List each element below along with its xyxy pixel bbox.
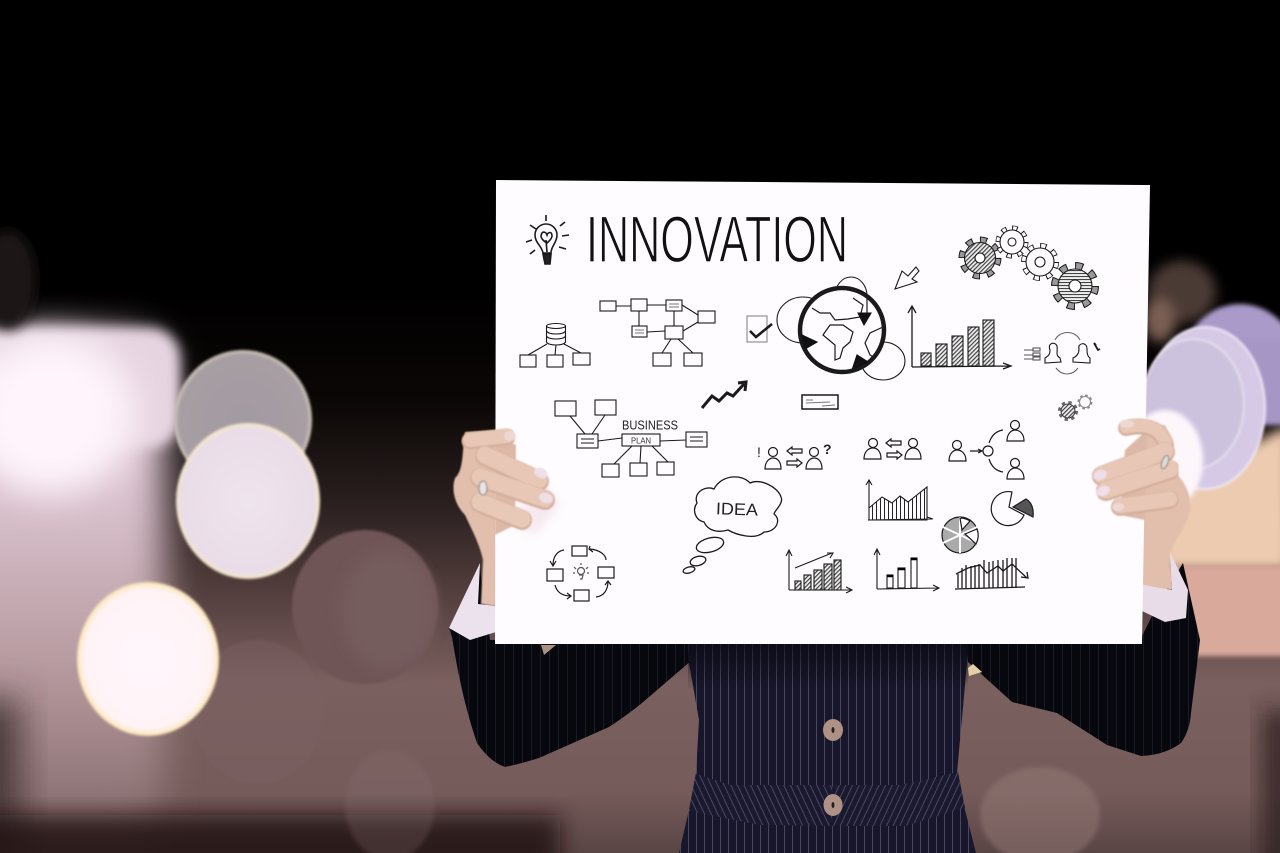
bar chart: columns	[874, 549, 939, 591]
diagram: network	[600, 299, 715, 366]
board	[495, 180, 1150, 644]
icon: people tree	[949, 420, 1024, 479]
icon: pointer arrow	[895, 267, 919, 289]
icon: small document	[802, 395, 838, 409]
hand: left fingers	[470, 431, 560, 535]
icon: people exchange	[864, 438, 921, 459]
icon: check box	[747, 316, 772, 342]
right sleeve	[966, 563, 1200, 756]
title: INNOVATION	[586, 202, 848, 276]
icon: team exchange	[1024, 332, 1100, 374]
icon: trend arrow	[702, 382, 746, 408]
area chart	[866, 480, 933, 520]
icon: light bulb	[526, 215, 569, 264]
pie chart: wedge	[991, 492, 1033, 526]
icon: people question: ?	[823, 441, 832, 457]
person: suit	[449, 563, 1200, 853]
left sleeve	[449, 568, 700, 767]
diagram: database	[520, 324, 590, 367]
ring	[1160, 454, 1170, 470]
board drawings	[520, 202, 1100, 601]
bokeh: left lights	[77, 350, 320, 736]
bokeh: right lights	[1127, 304, 1280, 510]
jacket body	[679, 640, 976, 853]
icon: globe	[777, 277, 905, 380]
button	[824, 794, 842, 816]
hand: left palm	[453, 430, 515, 606]
ring	[479, 481, 487, 495]
bokeh: faint discs	[192, 530, 1100, 853]
hand: right palm	[1140, 425, 1190, 590]
icon: small gears	[1060, 396, 1091, 419]
belt	[689, 772, 965, 826]
icon: people question: !	[757, 444, 761, 460]
icon: idea cloud	[682, 477, 782, 574]
label: idea: IDEA	[716, 499, 759, 520]
bar chart: falling line	[955, 558, 1028, 589]
cuff: left	[449, 563, 496, 640]
cuff: right	[1140, 552, 1188, 622]
icon: people question	[757, 441, 832, 469]
diagram: business plan	[555, 400, 707, 477]
diagram: idea cycle	[547, 546, 614, 601]
icon: gears	[962, 228, 1095, 306]
label: plan: PLAN	[631, 436, 651, 446]
label: business: BUSINESS	[622, 418, 678, 432]
bar chart: trend	[786, 550, 852, 593]
pie chart: segments	[942, 517, 978, 553]
hand: right fingers	[1092, 420, 1170, 520]
bar chart: growth	[908, 306, 1011, 369]
button	[823, 719, 843, 741]
